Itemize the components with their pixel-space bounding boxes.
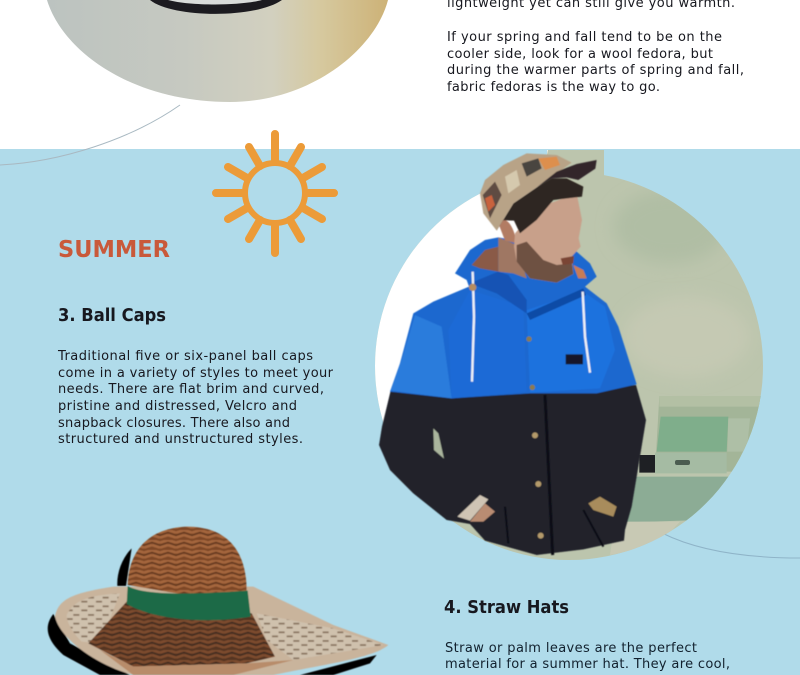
jacket patch xyxy=(566,354,583,364)
text: ball caps description: needs. There are flat brim and curved, xyxy=(58,382,324,397)
background: summer section xyxy=(0,149,800,675)
text: fedora description: cooler side, look for a wool fedora, but xyxy=(447,47,713,62)
text: ball caps description: snapback closures. There also and xyxy=(58,416,290,431)
hat brim xyxy=(55,587,388,675)
hair xyxy=(496,178,583,233)
text: fedora description: during the warmer parts of spring and fall, xyxy=(447,63,744,78)
hat ribbon xyxy=(127,586,251,620)
jacket lower: black xyxy=(379,385,646,555)
text: fedora description xyxy=(447,0,744,95)
text: ball caps description: come in a variety of styles to meet your xyxy=(58,366,334,381)
text: ball caps description: pristine and distressed, Velcro and xyxy=(58,399,297,414)
text: straw hats description: Straw or palm leaves are the perfect xyxy=(445,641,697,656)
image: man in ball cap and jacket xyxy=(367,147,770,570)
text: ball caps description xyxy=(57,349,334,447)
text: fedora description: If your spring and fall tend to be on the xyxy=(447,30,722,45)
cap xyxy=(480,153,572,231)
buttons xyxy=(532,432,538,438)
text: straw hats description xyxy=(445,641,730,672)
watch xyxy=(588,497,617,517)
hat shadow xyxy=(48,548,377,675)
face xyxy=(514,193,582,283)
hat front brim edge xyxy=(100,650,293,675)
curve line: lower right xyxy=(662,533,800,558)
text: ball caps description: Traditional five or six-panel ball caps xyxy=(57,349,313,364)
hood lining xyxy=(472,247,498,272)
jacket upper: blue xyxy=(390,237,637,398)
ear xyxy=(498,219,517,243)
toggle xyxy=(469,284,476,291)
heading: summer: SUMMER xyxy=(58,237,170,263)
heading: straw hats: 4. Straw Hats xyxy=(444,597,569,618)
heading: ball caps: 3. Ball Caps xyxy=(58,305,166,326)
curve line: upper left xyxy=(0,105,180,165)
drawstrings xyxy=(472,272,590,382)
neck xyxy=(498,237,527,278)
image: panama hat brim xyxy=(47,0,388,102)
mouth xyxy=(561,256,574,265)
hat band xyxy=(150,0,282,14)
icon: sun xyxy=(216,134,334,253)
text: ball caps description: structured and unstructured styles. xyxy=(58,432,303,447)
beard xyxy=(517,242,573,283)
wall backdrop in circle xyxy=(367,147,770,570)
image: straw hat xyxy=(48,527,388,675)
hat crown upper xyxy=(128,527,247,595)
hand and bracelet xyxy=(457,495,488,521)
text: fedora description: fabric fedoras is the way to go. xyxy=(447,80,660,95)
hat crown lower xyxy=(88,602,275,667)
text: straw hats description: material for a summer hat. They are cool, xyxy=(445,657,730,672)
